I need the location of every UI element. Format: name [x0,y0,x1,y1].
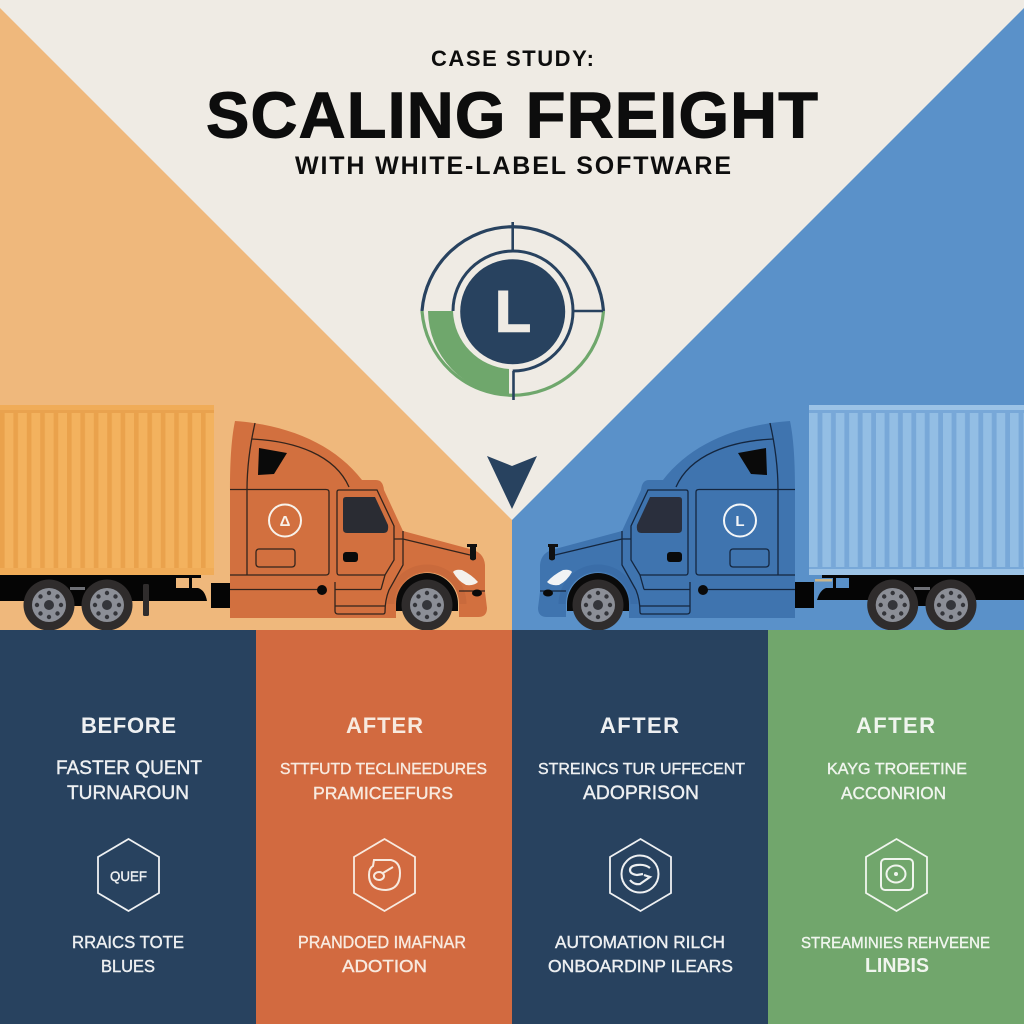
after footer orange: ADOTION [342,956,427,976]
orange door handle [343,552,358,562]
after heading navy: AFTER [600,713,679,738]
eyebrow: CASE STUDY: [431,46,594,71]
blue cab wheel [572,580,624,630]
blue trailer [809,405,1024,575]
blue axle bar [914,587,930,590]
blue trailer wheels [867,580,976,630]
title block [206,46,818,180]
after footer orange [298,932,466,976]
arrow pointing down [487,456,537,509]
before description: TURNAROUN [67,783,189,804]
panel: after orange [256,630,512,1024]
blue sleeper window [738,448,767,475]
panel: after navy [512,630,768,1024]
blue truck [538,405,1024,630]
orange step dot [317,585,327,595]
panel: before [0,630,256,1024]
after footer green: STREAMINIES REHVEENE [801,935,990,952]
background: orange wedge [0,8,512,630]
emblem letter: L [495,280,531,344]
before footer [72,932,184,976]
after footer navy [548,932,733,976]
subtitle: WITH WHITE-LABEL SOFTWARE [295,152,731,180]
after description navy [538,761,745,804]
orange bumper light [472,590,482,596]
after footer navy: AUTOMATION RILCH [555,932,725,952]
after heading orange: AFTER [346,713,423,738]
blue cab [538,421,795,630]
blue cab logo [724,504,756,536]
after footer orange: PRANDOED IMAFNAR [298,932,466,952]
after description navy: ADOPRISON [583,783,699,804]
icon: hexagon blob [354,839,415,911]
orange hood mirror [467,544,477,560]
orange cab logo: Δ [280,513,291,530]
after description green: ACCONRION [841,783,946,803]
after description orange [280,761,487,803]
emblem: circular logo [422,222,604,400]
after description navy: STREINCS TUR UFFECENT [538,761,745,778]
blue coupling streak [815,579,832,582]
icon: hexagon quef: QUEF [110,868,147,884]
icon: hexagon cycle [610,839,671,911]
icon: hexagon eye [866,839,927,911]
orange trailer [0,405,214,575]
blue headlight [547,570,572,585]
orange headlight [453,570,478,585]
orange chassis [0,575,207,606]
blue cab logo: L [735,513,745,530]
blue door handle [667,552,682,562]
orange axle bar [70,587,85,590]
before description [56,758,202,804]
orange sleeper window [258,448,287,475]
orange door window [343,497,388,533]
blue hood mirror [548,544,558,560]
orange trailer wheels [24,580,132,630]
blue step dot [698,585,708,595]
before description: FASTER QUENT [56,758,202,779]
orange mudflap [143,584,149,616]
blue door window [637,497,682,533]
after description orange: STTFUTD TECLINEEDURES [280,761,487,778]
orange cab logo [269,504,301,536]
orange truck [0,405,487,630]
blue connector [795,582,814,608]
after description orange: PRAMICEEFURS [313,783,453,803]
after footer green [801,935,990,977]
orange connector [211,583,230,608]
orange cab [230,421,487,630]
after footer navy: ONBOARDINP ILEARS [548,956,733,976]
after footer green: LINBIS [865,955,929,977]
before heading: BEFORE [81,713,176,738]
panel: after green [768,630,1024,1024]
before footer: BLUES [101,956,155,976]
after heading green: AFTER [856,713,935,738]
after description green: KAYG TROEETINE [827,761,967,778]
icon: hexagon quef [98,839,159,911]
after description green [827,761,967,803]
before footer: RRAICS TOTE [72,932,184,952]
blue bumper light [543,590,553,596]
background: blue wedge [512,8,1024,630]
orange cab wheel [402,580,452,630]
main title: SCALING FREIGHT [206,78,818,152]
blue chassis [817,575,1024,606]
